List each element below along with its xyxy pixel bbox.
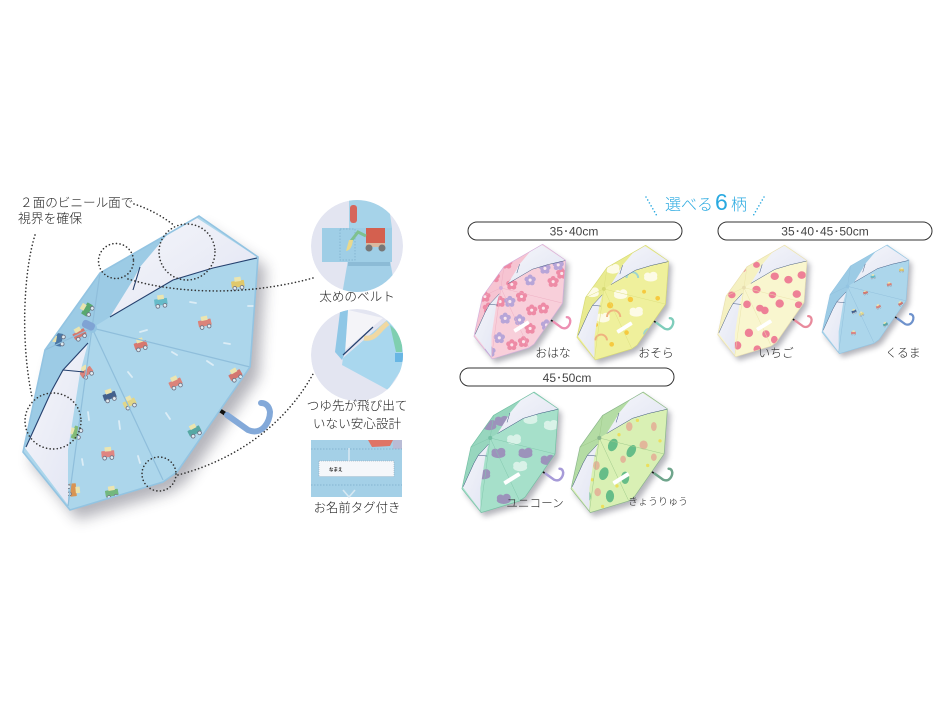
umbrella: kuruma [822,245,913,357]
callout: two vinyl panels text [18,196,133,226]
size pill: 45・50cm [460,368,674,386]
panel: safe tip detail [307,309,407,431]
canopy and handle [23,216,270,520]
callout: two vinyl panels text: 視界を確保 [18,211,82,226]
umbrella: osora [577,245,673,364]
umbrella: ohana [474,244,570,363]
label: つゆ先が飛び出て [307,399,407,413]
label: kuruma: くるま [885,346,921,360]
label: いない安心設計 [313,417,401,431]
size pill: 45・50cm: 45･50cm [543,371,591,385]
label: dinosaur: きょうりゅう [628,496,688,508]
umbrella: dinosaur [571,392,672,517]
panel: main umbrella [23,216,270,520]
panel: name tag detail [311,440,402,515]
umbrella: ichigo [718,245,812,361]
size pill: 35・40・45・50cm: 35･40･45･50cm [781,224,869,238]
callout circles and leader lines [25,204,313,491]
label: 太めのベルト [319,290,395,304]
inset circle [311,200,403,295]
icon: hub belt [81,319,96,332]
umbrella: unicorn [462,392,563,517]
size pill: 35・40cm [468,222,682,240]
label: お名前タグ付き [314,501,400,515]
heading: six patterns [646,189,764,216]
label: osora: おそら [638,346,674,360]
callout: two vinyl panels text: ２面のビニール面で [20,196,133,210]
label: ohana: おはな [535,346,571,360]
tag photo: なまえ [329,466,343,473]
vehicle prints [51,276,253,500]
panel: wide belt detail [311,200,403,304]
size pill: 35・40cm: 35･40cm [550,224,598,238]
size pill: 35・40・45・50cm [718,222,932,240]
inset circle [311,309,404,401]
label: ichigo: いちご [758,346,794,360]
vinyl windows and ribs [23,216,258,510]
label: unicorn: ユニコーン [506,497,564,510]
heading: six patterns: 選べる6柄 [665,189,747,215]
